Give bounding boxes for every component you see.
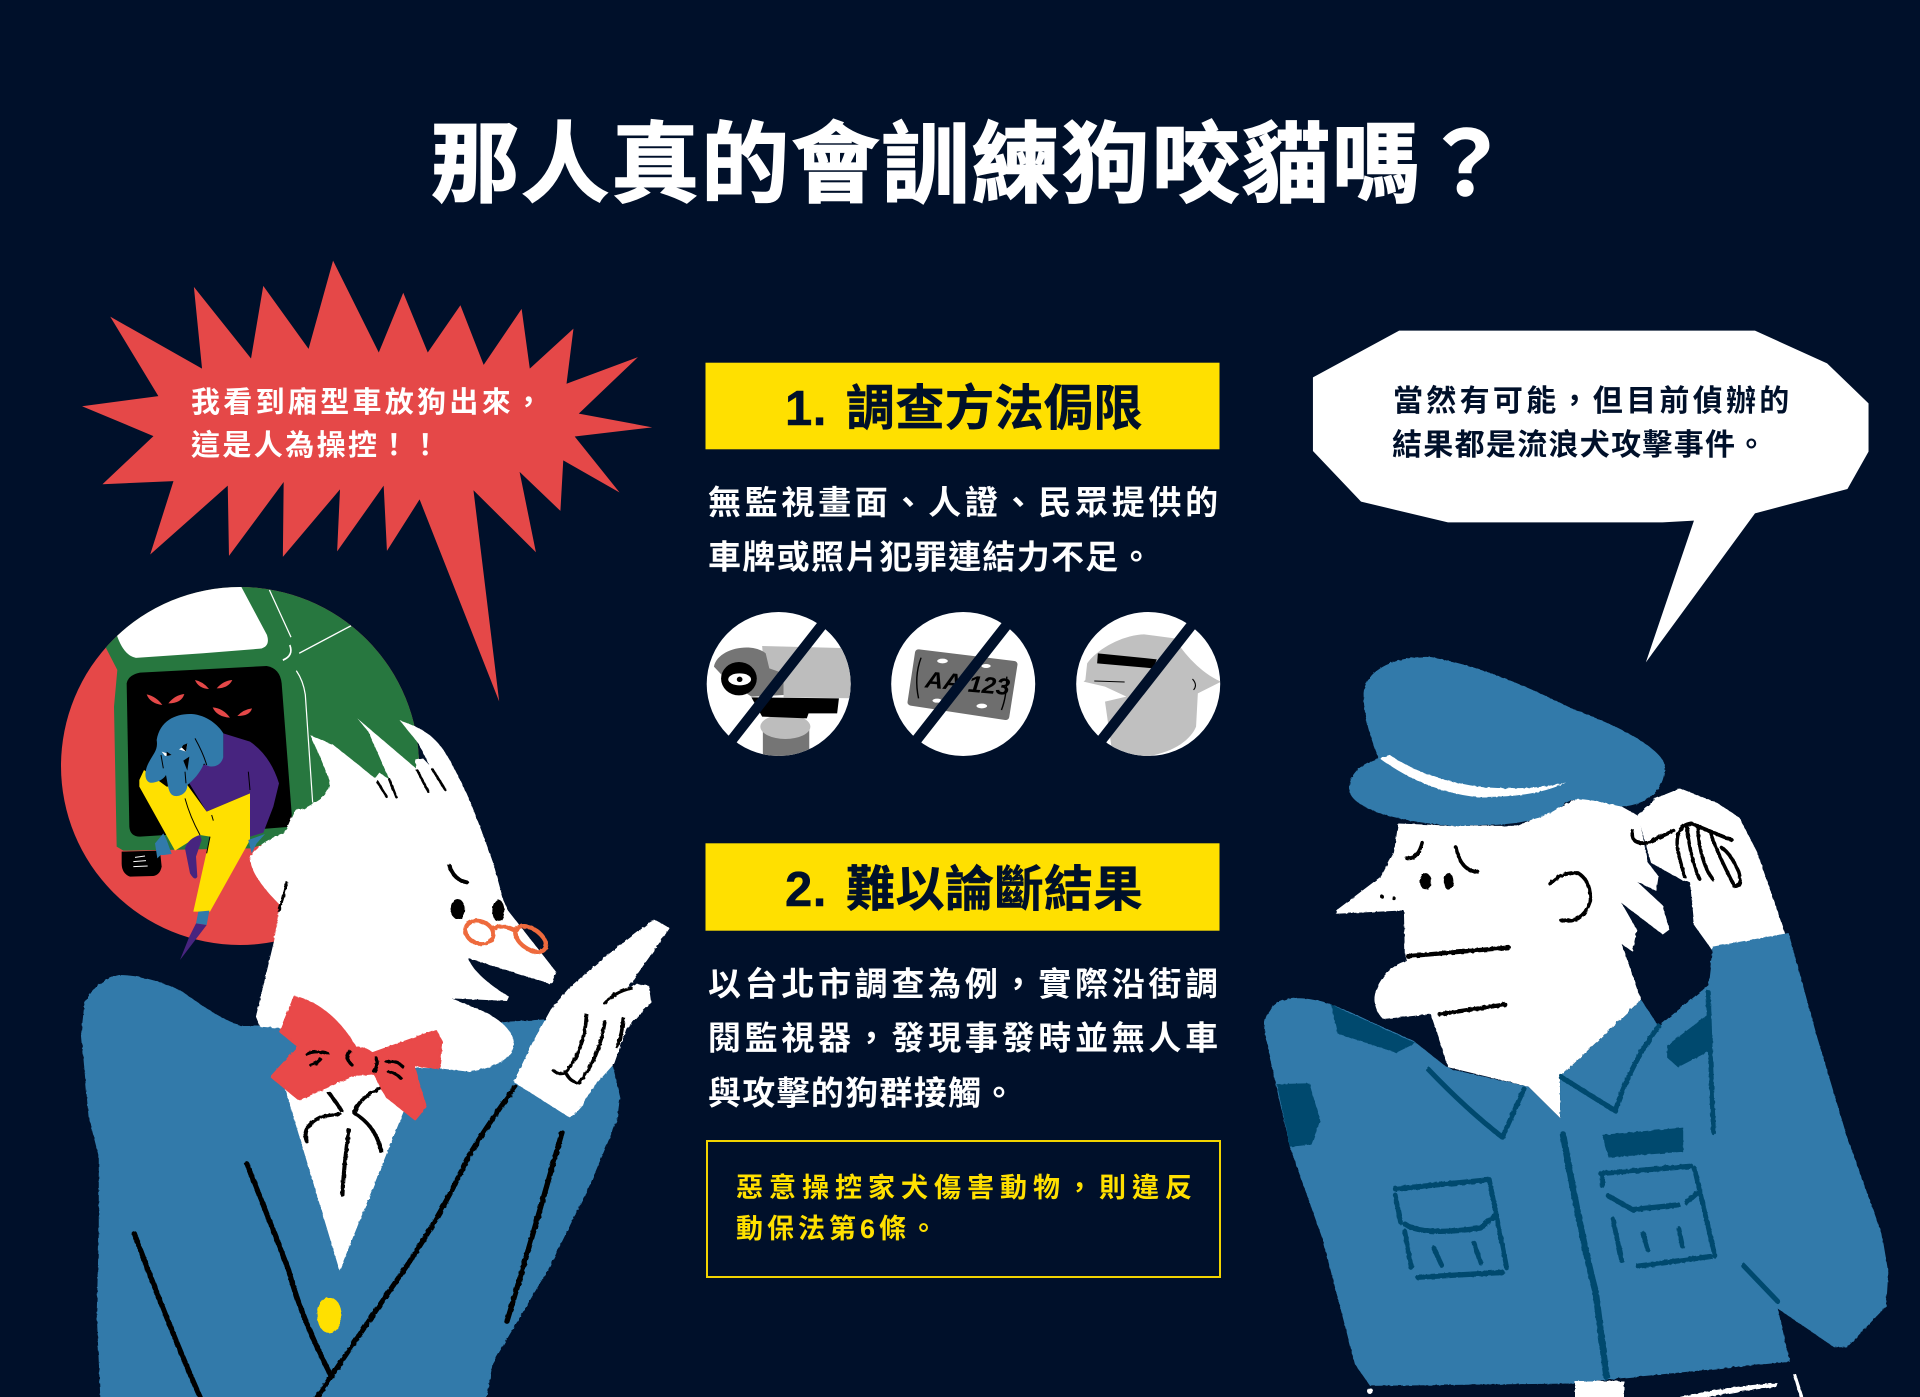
icon: face with censored eyes [1076, 612, 1221, 757]
police face lines [1381, 843, 1590, 1014]
heading: section 1 [706, 363, 1220, 449]
callout: animal protection law [707, 1141, 1220, 1277]
van circle background [61, 587, 419, 945]
bubble shape [1313, 331, 1869, 662]
burst text [191, 386, 546, 462]
shirt and jacket lines [134, 1087, 562, 1397]
text block: section 1 body [708, 484, 1222, 576]
burst text: 我看到廂型車放狗出來， [191, 386, 546, 419]
icons: crossed-out evidence [707, 612, 1221, 758]
van bumper [122, 851, 162, 877]
text block: section 1 body: 無監視畫面、人證、民眾提供的 [708, 484, 1222, 521]
character: police officer [1264, 657, 1888, 1397]
police uniform [1264, 933, 1888, 1386]
police cap [1350, 657, 1665, 826]
burst shape [82, 261, 652, 701]
face details and glasses [377, 769, 551, 957]
panel: left speech burst [82, 261, 652, 701]
dog character [139, 714, 279, 960]
heading: section 1: 1. 調查方法侷限 [785, 382, 1143, 436]
text block: section 2 body: 閱監視器，發現事發時並無人車 [708, 1020, 1222, 1056]
back of head line [278, 882, 287, 912]
bubble text: 當然有可能，但目前偵辦的 [1393, 385, 1793, 418]
character: man in blue suit with bow tie [81, 718, 668, 1397]
burst text: 這是人為操控！！ [191, 428, 442, 462]
icon: license plate [891, 612, 1035, 756]
callout: animal protection law: 惡意操控家犬傷害動物，則違反 [736, 1173, 1198, 1203]
yellow button [317, 1297, 342, 1333]
illustration: van and dog scene in circle [61, 587, 419, 960]
title: 那人真的會訓練狗咬貓嗎？ [431, 115, 1512, 214]
bubble text: 結果都是流浪犬攻擊事件。 [1392, 429, 1768, 462]
red bow tie [271, 997, 442, 1119]
van window [127, 666, 292, 837]
police face [1336, 795, 1669, 1118]
bubble text [1392, 385, 1793, 462]
raised hand [1632, 790, 1784, 949]
shirt [280, 1073, 405, 1271]
head [250, 718, 556, 1072]
icon: license plate: AA [923, 667, 963, 696]
uniform patches [1277, 1004, 1711, 1158]
suit jacket [81, 975, 620, 1397]
heading: section 2: 2. 難以論斷結果 [785, 863, 1143, 917]
icon: surveillance camera [707, 612, 855, 758]
text block: section 2 body: 與攻擊的狗群接觸。 [708, 1074, 1017, 1112]
text block: section 1 body: 車牌或照片犯罪連結力不足。 [708, 538, 1154, 576]
heading: section 2 [706, 843, 1220, 931]
text block: section 2 body [708, 966, 1222, 1112]
uniform lines and pockets [1395, 992, 1778, 1376]
red eyes in van [147, 680, 252, 718]
callout: animal protection law: 動保法第6條。 [736, 1214, 941, 1244]
panel: right speech bubble [1313, 331, 1869, 662]
pointing hand [515, 921, 668, 1117]
icon: license plate: 123 [967, 671, 1012, 701]
trousers details [1367, 1374, 1806, 1397]
text block: section 2 body: 以台北市調查為例，實際沿街調 [708, 966, 1222, 1002]
